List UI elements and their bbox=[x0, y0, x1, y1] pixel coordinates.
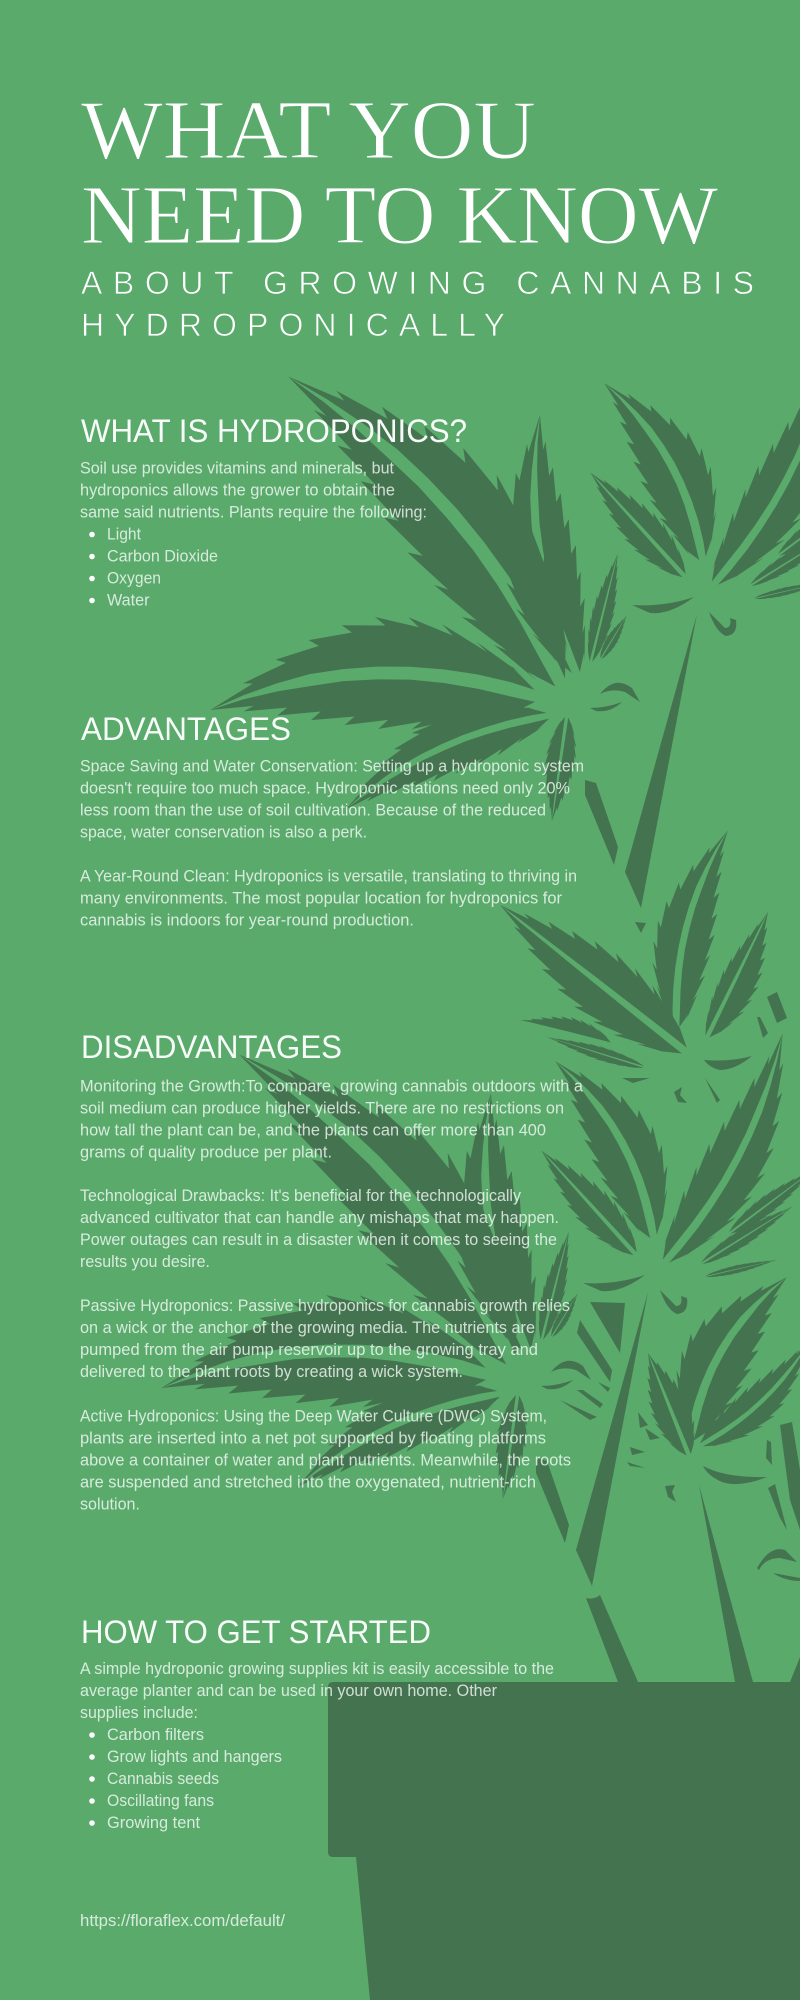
text: supplies intro: A simple hydroponic growing supplies kit is easily accessible to the bbox=[80, 1660, 554, 1678]
source url: https://floraflex.com/default/ bbox=[80, 1912, 285, 1930]
list: plant requirements: Water bbox=[107, 592, 150, 610]
curl: small right sprout bbox=[600, 683, 640, 702]
leaf: up-right upper half bbox=[694, 906, 768, 1036]
list: plant requirements: Oxygen bbox=[107, 570, 161, 588]
leaf: left bbox=[520, 1005, 614, 1044]
heading: what is hydroponics: WHAT IS HYDROPONICS? bbox=[81, 413, 467, 449]
leaf: plant two left bbox=[576, 459, 699, 589]
title: WHAT YOU bbox=[81, 84, 536, 177]
text: space saving bbox=[80, 758, 584, 842]
leaf: plant two up-left bbox=[590, 357, 748, 567]
crescent: right bbox=[704, 1056, 752, 1070]
text: year-round clean: A Year-Round Clean: Hydroponics is versatile, translating to thriving in bbox=[80, 868, 577, 886]
text: passive hydroponics: on a wick or the anchor of the growing media. The nutrients are bbox=[80, 1319, 535, 1337]
subtitle: HYDROPONICALLY bbox=[81, 307, 505, 343]
sprout: fine teeth bbox=[590, 702, 622, 711]
text: monitoring the growth bbox=[80, 1078, 584, 1162]
leaf: plant two right thin bbox=[773, 483, 800, 562]
text: active hydroponics: Active Hydroponics: Using the Deep Water Culture (DWC) System, bbox=[80, 1408, 547, 1426]
text: intro: same said nutrients. Plants require the following: bbox=[80, 504, 427, 522]
curl: plant two sprout bbox=[709, 612, 736, 636]
curl and fragments bbox=[627, 1412, 800, 1581]
illustration: potted cannabis plants bbox=[159, 316, 800, 2000]
section: what is hydroponics bbox=[80, 413, 467, 610]
text: monitoring the growth: grams of quality produce per plant. bbox=[80, 1144, 332, 1162]
heading: how to get started: HOW TO GET STARTED bbox=[81, 1614, 431, 1650]
text: space saving: space, water conservation is also a perk. bbox=[80, 824, 367, 842]
section: how to get started bbox=[80, 1614, 554, 1832]
text: technological drawbacks: advanced cultivator that can handle any mishaps that may happen. bbox=[80, 1209, 559, 1227]
text: passive hydroponics: Passive Hydroponics: Passive hydroponics for cannabis growth relies bbox=[80, 1297, 570, 1315]
list: supplies: Grow lights and hangers bbox=[107, 1748, 282, 1766]
plant five: lower right bbox=[627, 1249, 800, 1682]
list: supplies: Cannabis seeds bbox=[107, 1770, 219, 1788]
list: plant requirements: Carbon Dioxide bbox=[107, 548, 218, 566]
leaf: narrow up-right bbox=[580, 551, 629, 664]
list: supplies bbox=[89, 1726, 282, 1832]
text: intro: hydroponics allows the grower to obtain the bbox=[80, 482, 395, 500]
leaf: downward bbox=[537, 715, 582, 823]
leaf: up-right bbox=[694, 1333, 800, 1466]
text: technological drawbacks: Power outages can result in a disaster when it comes to seeing the bbox=[80, 1231, 557, 1249]
section: disadvantages bbox=[80, 1029, 584, 1514]
text: monitoring the growth: soil medium can produce higher yields. There are no restrictions on bbox=[80, 1100, 564, 1118]
plant group: upper plants bbox=[208, 316, 800, 908]
text: monitoring the growth: Monitoring the Growth:To compare, growing cannabis outdoors with a bbox=[80, 1078, 584, 1096]
crescent: right bbox=[703, 1466, 767, 1484]
stem: corner bbox=[790, 1657, 800, 1682]
title: NEED TO KNOW bbox=[81, 169, 719, 262]
text: supplies intro bbox=[80, 1660, 554, 1722]
text: supplies intro: supplies include: bbox=[80, 1704, 198, 1722]
section: advantages bbox=[80, 711, 584, 930]
leaf: upward bbox=[482, 412, 595, 681]
pot bbox=[328, 1682, 800, 2000]
text: space saving: less room than the use of soil cultivation. Because of the reduced bbox=[80, 802, 546, 820]
text: active hydroponics: above a container of water and plant nutrients. Meanwhile, the roots bbox=[80, 1452, 571, 1470]
text: year-round clean: cannabis is indoors for year-round production. bbox=[80, 912, 414, 930]
leaf: plant two right small bbox=[753, 578, 800, 603]
subtitle: ABOUT GROWING CANNABIS bbox=[81, 265, 754, 301]
subtitle bbox=[81, 265, 754, 343]
list: plant requirements: Light bbox=[107, 526, 141, 544]
text: active hydroponics: are suspended and stretched into the oxygenated, nutrient-rich bbox=[80, 1474, 536, 1492]
leaf: small up-right bbox=[596, 612, 632, 662]
stem: plant two bbox=[625, 614, 697, 908]
leaf: lower left bbox=[545, 1030, 646, 1074]
text: active hydroponics: solution. bbox=[80, 1496, 140, 1514]
stem: lower continuation bbox=[586, 1595, 638, 1682]
heading: disadvantages: DISADVANTAGES bbox=[81, 1029, 342, 1065]
plant three: middle right bbox=[479, 819, 790, 1103]
text: technological drawbacks bbox=[80, 1187, 559, 1271]
leaf: plant two up-right bbox=[700, 349, 800, 605]
text: intro bbox=[80, 460, 427, 522]
stem: plant one bbox=[585, 780, 618, 865]
leaf: up-left bbox=[630, 1346, 707, 1462]
leaf: left horizontal bbox=[208, 612, 536, 735]
text: passive hydroponics: delivered to the plant roots by creating a wick system. bbox=[80, 1363, 463, 1381]
leaf: upward bbox=[634, 819, 741, 1030]
fragments bbox=[622, 922, 787, 1103]
crescent: plant two left sprout bbox=[632, 597, 694, 613]
text: technological drawbacks: results you desire. bbox=[80, 1253, 210, 1271]
text: space saving: doesn't require too much space. Hydroponic stations need only 20% bbox=[80, 780, 570, 798]
text: technological drawbacks: Technological Drawbacks: It's beneficial for the technologically bbox=[80, 1187, 522, 1205]
text: passive hydroponics bbox=[80, 1297, 570, 1381]
text: active hydroponics bbox=[80, 1408, 571, 1514]
text: year-round clean: many environments. The most popular location for hydroponics for bbox=[80, 890, 562, 908]
leaf: up-left bbox=[479, 878, 705, 1077]
list: supplies: Growing tent bbox=[107, 1814, 200, 1832]
leaf: upward bbox=[645, 1249, 800, 1448]
title bbox=[81, 84, 719, 262]
text: monitoring the growth: how tall the plant can be, and the plants can offer more than 400 bbox=[80, 1122, 546, 1140]
list: plant requirements bbox=[89, 526, 218, 610]
text: space saving: Space Saving and Water Conservation: Setting up a hydroponic system bbox=[80, 758, 584, 776]
plant group: lower copy of upper plants bbox=[159, 994, 800, 1586]
list: supplies: Carbon filters bbox=[107, 1726, 204, 1744]
leaf: big up-left bbox=[268, 316, 627, 703]
list: supplies: Oscillating fans bbox=[107, 1792, 214, 1810]
leaf: plant two right middle bbox=[746, 521, 800, 592]
text: supplies intro: average planter and can be used in your own home. Other bbox=[80, 1682, 497, 1700]
leaf: lower-left bbox=[326, 676, 554, 822]
text: active hydroponics: plants are inserted into a net pot supported by floating platforms bbox=[80, 1430, 546, 1448]
stem: plant five bbox=[699, 1485, 753, 1682]
text: year-round clean bbox=[80, 868, 577, 930]
text: intro: Soil use provides vitamins and minerals, but bbox=[80, 460, 394, 478]
fragments: between lower plants bbox=[560, 1302, 625, 1420]
text: passive hydroponics: pumped from the air pump reservoir up to the growing tray and bbox=[80, 1341, 538, 1359]
leaf: up-right lower half bbox=[707, 912, 790, 1047]
heading: advantages: ADVANTAGES bbox=[81, 711, 291, 747]
